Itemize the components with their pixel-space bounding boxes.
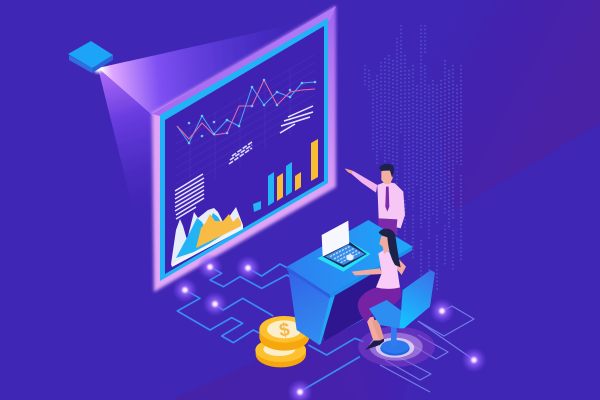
text lines top right	[280, 106, 313, 133]
woman torso	[376, 248, 400, 289]
chair base	[380, 327, 410, 356]
desk shadow underside	[323, 262, 390, 342]
bar chart	[253, 139, 318, 212]
woman far arm	[352, 268, 383, 275]
screen blue frame	[160, 18, 328, 281]
woman legs	[366, 317, 380, 341]
circuit lines right of chair	[380, 306, 474, 392]
projector	[68, 41, 113, 73]
man tie	[385, 187, 389, 212]
man arm	[345, 168, 377, 193]
screen top frame	[152, 6, 336, 116]
text block left	[175, 174, 204, 219]
chair seat and back	[369, 270, 435, 328]
desk leg panel	[288, 272, 332, 345]
projector light cone	[94, 20, 312, 290]
area chart	[171, 207, 243, 267]
screen outer glow frame	[152, 5, 336, 292]
desk	[287, 220, 413, 345]
woman neck and face	[379, 236, 390, 254]
desk top	[287, 220, 413, 295]
standing man	[345, 164, 405, 235]
laptop	[317, 221, 371, 272]
man torso	[377, 182, 405, 228]
man head	[381, 170, 393, 184]
text lines center	[229, 142, 252, 164]
line chart	[177, 79, 316, 144]
data dot columns	[365, 25, 461, 290]
coins	[255, 316, 309, 367]
woman shoes	[365, 341, 380, 350]
woman skirt	[358, 287, 402, 322]
bottom coin	[255, 338, 306, 367]
top coin: $	[278, 318, 292, 341]
woman hair	[379, 229, 401, 267]
man hair	[379, 164, 394, 177]
projected screen	[152, 5, 336, 292]
man legs	[378, 218, 397, 235]
sitting woman	[352, 229, 406, 350]
chair glow rings	[358, 327, 435, 367]
desk, people and chair (drawn in 3x coordinates)	[287, 164, 435, 367]
screen grid	[176, 55, 314, 192]
screen panel	[165, 26, 324, 274]
glow nodes	[172, 254, 487, 400]
circuit lines left of desk	[177, 264, 363, 392]
